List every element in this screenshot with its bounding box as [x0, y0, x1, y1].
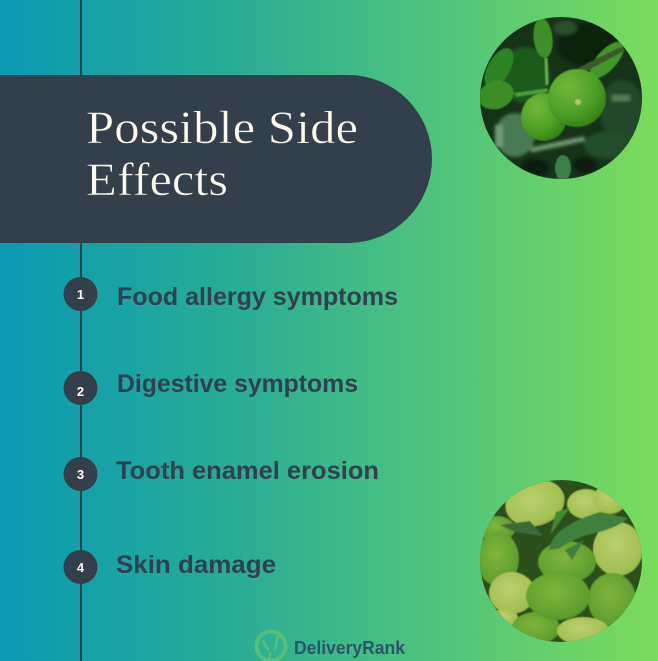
step 1: 1 [77, 287, 84, 302]
step 2: Digestive symptoms [117, 370, 358, 398]
logo icon [256, 632, 286, 661]
title panel [0, 75, 432, 243]
photo: pile of limes [477, 473, 643, 645]
step 3: 3 [77, 467, 84, 482]
steps list [64, 277, 398, 584]
title [86, 102, 358, 206]
photo: limes on branch [475, 17, 644, 181]
step 4: Skin damage [116, 551, 276, 579]
step 3 [64, 457, 379, 491]
step 4 [64, 550, 276, 584]
timeline vertical line [80, 0, 82, 661]
title: Possible Side [86, 102, 358, 154]
step 3: Tooth enamel erosion [116, 457, 379, 485]
step 1: Food allergy symptoms [117, 283, 398, 311]
leaves [532, 19, 554, 58]
step 1 [64, 277, 398, 311]
step 4: 4 [77, 560, 85, 575]
limes [521, 93, 567, 141]
logo: DeliveryRank [256, 632, 406, 661]
leaves [549, 512, 628, 550]
title: Effects [86, 154, 228, 206]
step 2: 2 [77, 384, 84, 399]
step 2 [64, 370, 358, 405]
logo: DeliveryRank: DeliveryRank [294, 638, 406, 658]
